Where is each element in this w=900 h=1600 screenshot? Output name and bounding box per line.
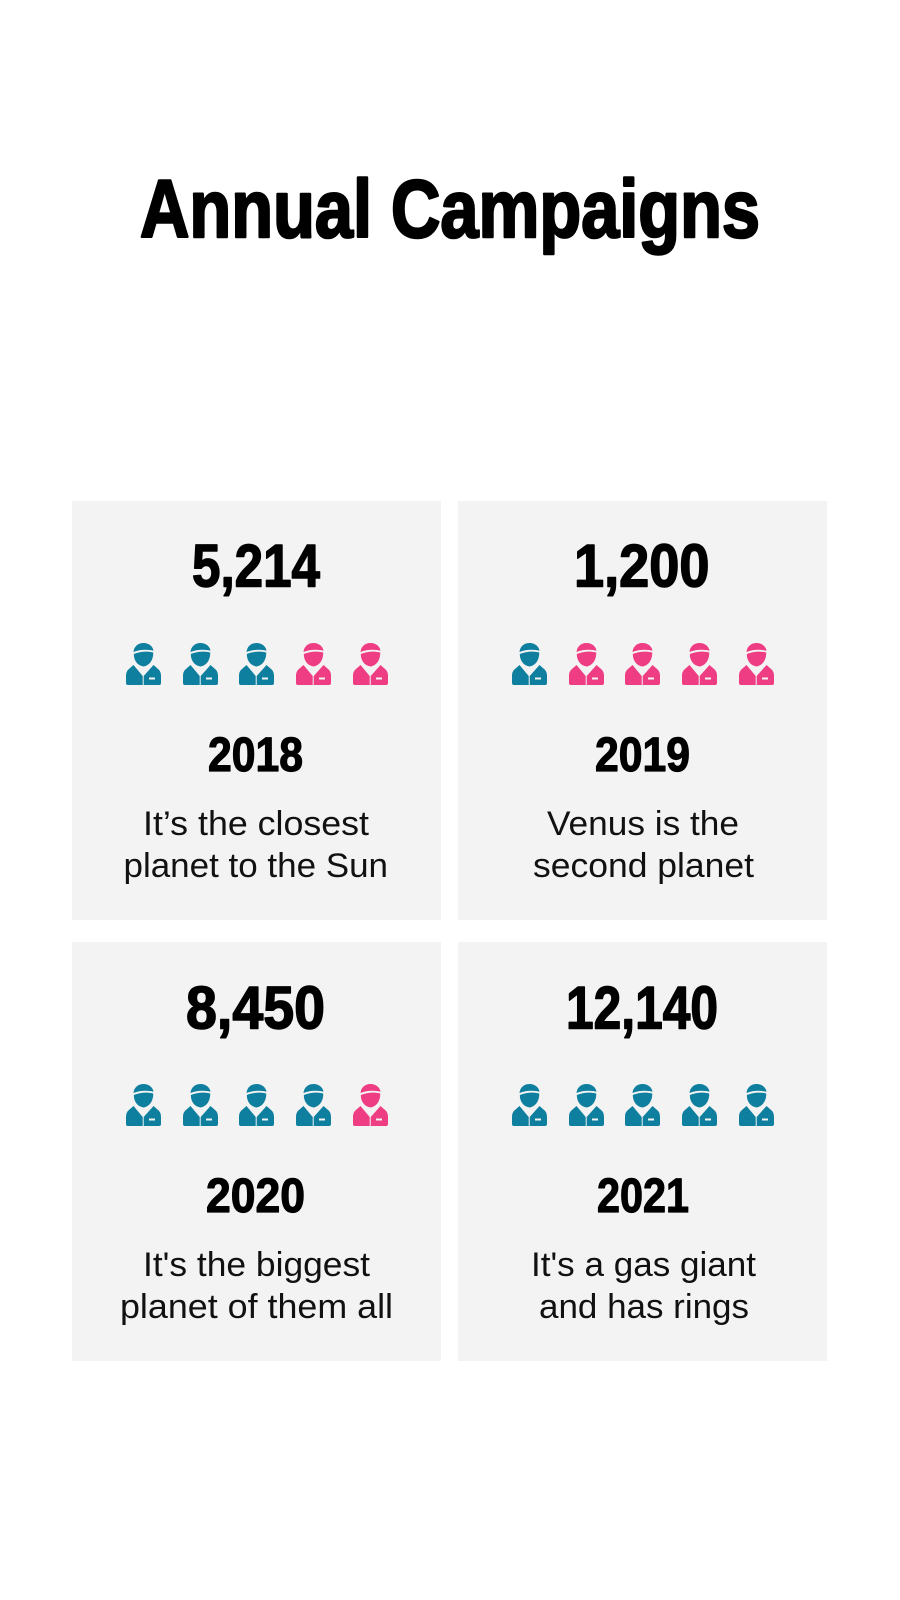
number: 12,140: 12,140 bbox=[566, 974, 718, 1042]
description: 2018: It’s the closest bbox=[143, 805, 370, 843]
description: 2018: planet to the Sun bbox=[124, 847, 388, 885]
description: 2020: It's the biggest bbox=[143, 1246, 371, 1284]
icon row: 4 of 5 teal bbox=[126, 1084, 388, 1126]
description: 2019: Venus is the bbox=[547, 805, 739, 843]
year: 2019: 2019 bbox=[595, 729, 690, 782]
number: 8,450: 8,450 bbox=[186, 974, 325, 1042]
panel: 2019 bbox=[458, 501, 827, 920]
number: 5,214: 5,214 bbox=[192, 532, 321, 600]
description: 2021: It's a gas giant bbox=[531, 1246, 757, 1284]
description: 2019 bbox=[533, 805, 755, 885]
panel: 2018 bbox=[72, 501, 441, 920]
description: 2018 bbox=[124, 805, 388, 885]
year: 2021: 2021 bbox=[597, 1170, 689, 1223]
number: 1,200: 1,200 bbox=[574, 532, 710, 600]
description: 2020 bbox=[120, 1246, 393, 1326]
panel: 2021 bbox=[458, 942, 827, 1361]
icon row: 1 of 5 teal bbox=[512, 643, 774, 685]
icon row: 5 of 5 teal bbox=[512, 1084, 774, 1126]
year: 2020: 2020 bbox=[206, 1170, 305, 1223]
icon row: 3 of 5 teal bbox=[126, 643, 388, 685]
title: Annual Campaigns bbox=[140, 164, 760, 255]
panel: 2020 bbox=[72, 942, 441, 1361]
description: 2021: and has rings bbox=[539, 1288, 749, 1326]
description: 2021 bbox=[531, 1246, 757, 1326]
description: 2019: second planet bbox=[533, 847, 755, 885]
year: 2018: 2018 bbox=[208, 729, 303, 782]
description: 2020: planet of them all bbox=[120, 1288, 393, 1326]
